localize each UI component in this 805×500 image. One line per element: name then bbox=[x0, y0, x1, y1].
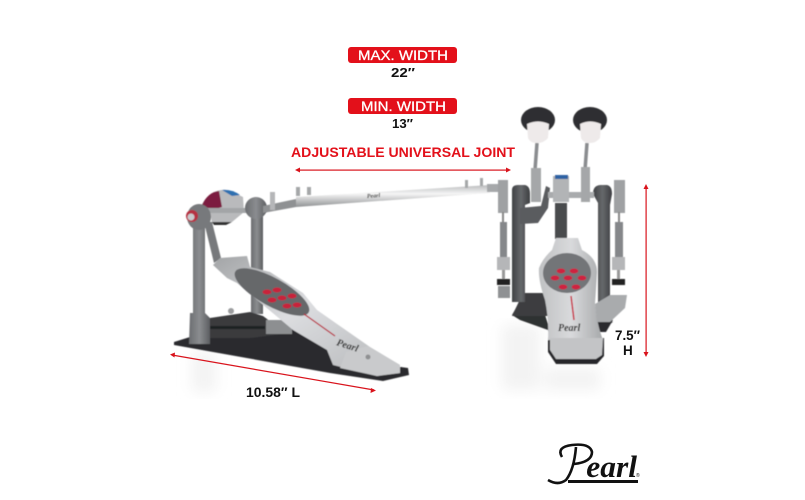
arrow: length bbox=[170, 352, 376, 393]
right pedal rear base right bbox=[593, 318, 613, 332]
right pedal logo text: Pearl bbox=[558, 323, 580, 334]
logo registered mark: ® bbox=[636, 472, 640, 479]
beater right bbox=[573, 107, 607, 202]
min width badge bbox=[348, 98, 457, 114]
beater left bbox=[521, 107, 555, 202]
adjustable universal joint heading: ADJUSTABLE UNIVERSAL JOINT bbox=[291, 144, 515, 160]
left pedal bbox=[174, 190, 409, 381]
left pedal drive link bbox=[204, 222, 221, 263]
floor reflections bbox=[192, 325, 600, 392]
right pedal oval insert bbox=[543, 253, 591, 293]
shaft tube bbox=[296, 185, 490, 207]
right pedal base rear bbox=[512, 296, 613, 345]
left pedal red dots bbox=[262, 288, 302, 308]
logo swash bbox=[548, 445, 592, 483]
right pedal footboard bbox=[539, 238, 603, 340]
left pedal linkage hinge bbox=[210, 308, 292, 334]
length label: 10.58″ L bbox=[246, 385, 300, 400]
left pedal toe plate bbox=[340, 346, 400, 376]
connecting drive shaft bbox=[263, 178, 501, 213]
right pedal red line bbox=[571, 296, 574, 320]
shaft logo text: Pearl bbox=[367, 193, 381, 200]
left pedal cam with coloured top bbox=[202, 190, 253, 225]
left post bbox=[512, 185, 550, 302]
min width value: 13″ bbox=[392, 116, 413, 131]
right pedal toe plate bbox=[550, 338, 603, 359]
max width label bbox=[348, 47, 457, 80]
left pedal rear frame bbox=[210, 312, 290, 338]
max width value: 22″ bbox=[391, 65, 415, 80]
left pedal red line bbox=[304, 314, 335, 336]
arrow: height bbox=[644, 184, 648, 357]
left pedal oval insert bbox=[228, 259, 316, 325]
center block with blue cap bbox=[553, 175, 569, 239]
right pedal clamp bbox=[595, 295, 627, 322]
min width label bbox=[348, 98, 457, 131]
arrow: joint width bbox=[295, 168, 511, 172]
min width badge text: MIN. WIDTH bbox=[361, 98, 446, 114]
left pedal logo text: Pearl bbox=[335, 337, 360, 355]
left pedal right post bbox=[251, 212, 263, 314]
height unit: H bbox=[623, 343, 633, 358]
height label bbox=[615, 328, 641, 358]
shaft joint right bbox=[465, 178, 501, 192]
logo underline bbox=[568, 480, 638, 483]
left pedal pivot caps bbox=[186, 197, 267, 230]
left pedal toe bolt bbox=[366, 354, 370, 360]
Pearl logo bbox=[548, 445, 640, 484]
cross shaft bbox=[548, 192, 594, 198]
left spring assembly bbox=[497, 180, 510, 298]
right pedal red dots bbox=[551, 268, 586, 290]
right pedal bbox=[497, 107, 627, 364]
left pedal footboard bbox=[213, 256, 400, 376]
left pedal left post bbox=[189, 222, 210, 344]
right spring assembly bbox=[612, 180, 625, 285]
height value: 7.5″ bbox=[615, 328, 641, 343]
max width badge text: MAX. WIDTH bbox=[358, 47, 448, 63]
max width badge bbox=[348, 47, 457, 63]
right pedal toe base bbox=[548, 338, 604, 364]
right pedal rear gusset bbox=[512, 293, 548, 316]
logo wordmark: Pearl bbox=[566, 449, 637, 484]
right post bbox=[593, 185, 612, 302]
shaft joint left bbox=[263, 187, 311, 213]
left pedal base plate bbox=[174, 322, 409, 381]
